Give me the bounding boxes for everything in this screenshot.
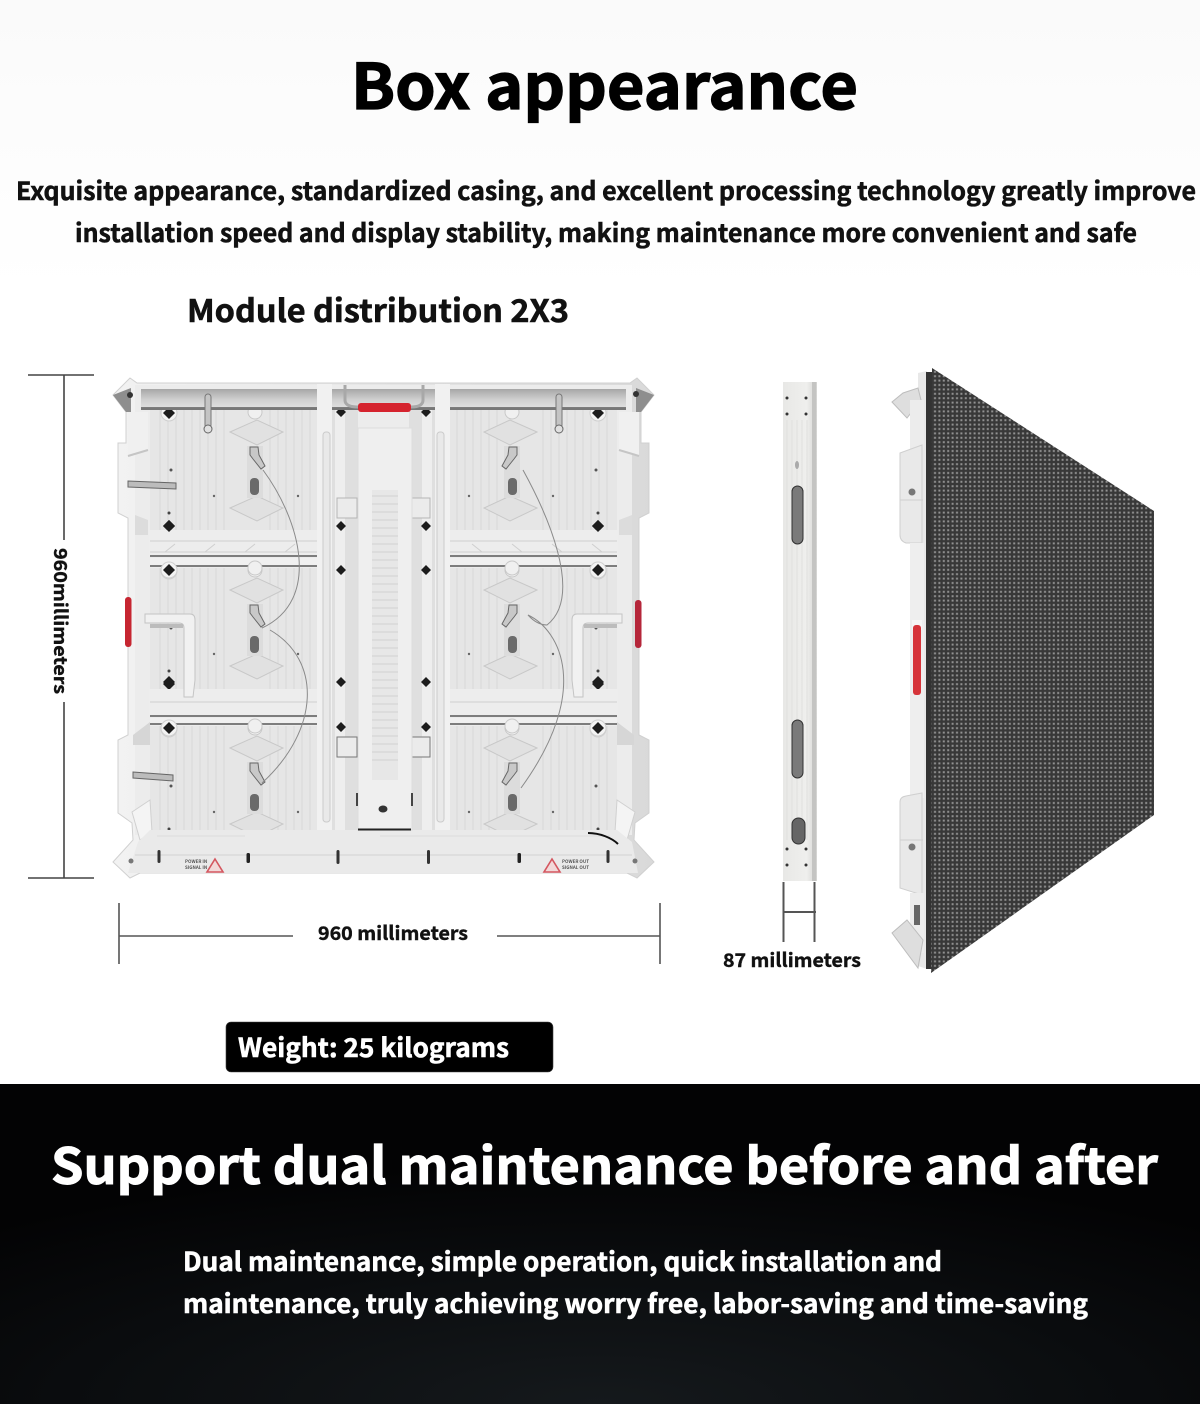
title: Box appearance (351, 37, 858, 128)
band text block: Dual maintenance, simple operation, quick installation and (183, 1242, 942, 1279)
illustration: cabinet back view: POWER IN (185, 859, 207, 865)
frame edge (926, 372, 933, 969)
side frame (918, 371, 927, 969)
central ledge (332, 389, 435, 410)
side latches (128, 481, 176, 489)
top carry handle with red grip (345, 385, 423, 407)
frame bulges (128, 412, 639, 456)
illustration: cabinet back view: SIGNAL OUT (562, 865, 589, 871)
dimension: width 960 millimeters (119, 903, 660, 964)
corner shadows (113, 388, 131, 412)
intro text block (16, 172, 1196, 250)
illustration: cabinet angled front view (892, 368, 1154, 973)
dimension: height 960 millimeters (28, 375, 94, 878)
band text block (183, 1242, 1088, 1321)
intro text block: Exquisite appearance, standardized casing, and excellent processing technology greatly improve (16, 172, 1196, 208)
central bar (358, 428, 412, 830)
weight badge: Weight: 25 kilograms (238, 1028, 509, 1065)
dimension: depth 87 millimeters (723, 882, 861, 973)
illustration: cabinet back view (113, 378, 654, 878)
bottom rail (128, 830, 638, 873)
right half (409, 384, 626, 864)
top haze (0, 0, 1200, 290)
side red handles (125, 597, 132, 647)
illustration: cabinet back view: POWER OUT (562, 859, 589, 865)
module distribution heading: Module distribution 2X3 (187, 286, 569, 331)
band text block: maintenance, truly achieving worry free, labor-saving and time-saving (183, 1284, 1088, 1321)
illustration: cabinet side view (783, 382, 817, 881)
handle slots (792, 486, 803, 544)
dimension: height 960 millimeters: 960millimeters (48, 548, 74, 694)
illustration: cabinet back view: SIGNAL IN (185, 865, 207, 871)
warning labels (207, 859, 560, 872)
dimension: depth 87 millimeters: 87 millimeters (723, 946, 861, 973)
LED screen (931, 368, 1154, 973)
safety cables (262, 470, 307, 783)
cabinet outline (113, 378, 654, 878)
weight badge (226, 1022, 553, 1072)
left half (141, 384, 358, 864)
dimension: width 960 millimeters: 960 millimeters (318, 919, 468, 946)
band heading: Support dual maintenance before and after (51, 1127, 1158, 1199)
intro text block: installation speed and display stability, making maintenance more convenient and safe (75, 214, 1137, 250)
panel: dual maintenance band (0, 1084, 1200, 1404)
